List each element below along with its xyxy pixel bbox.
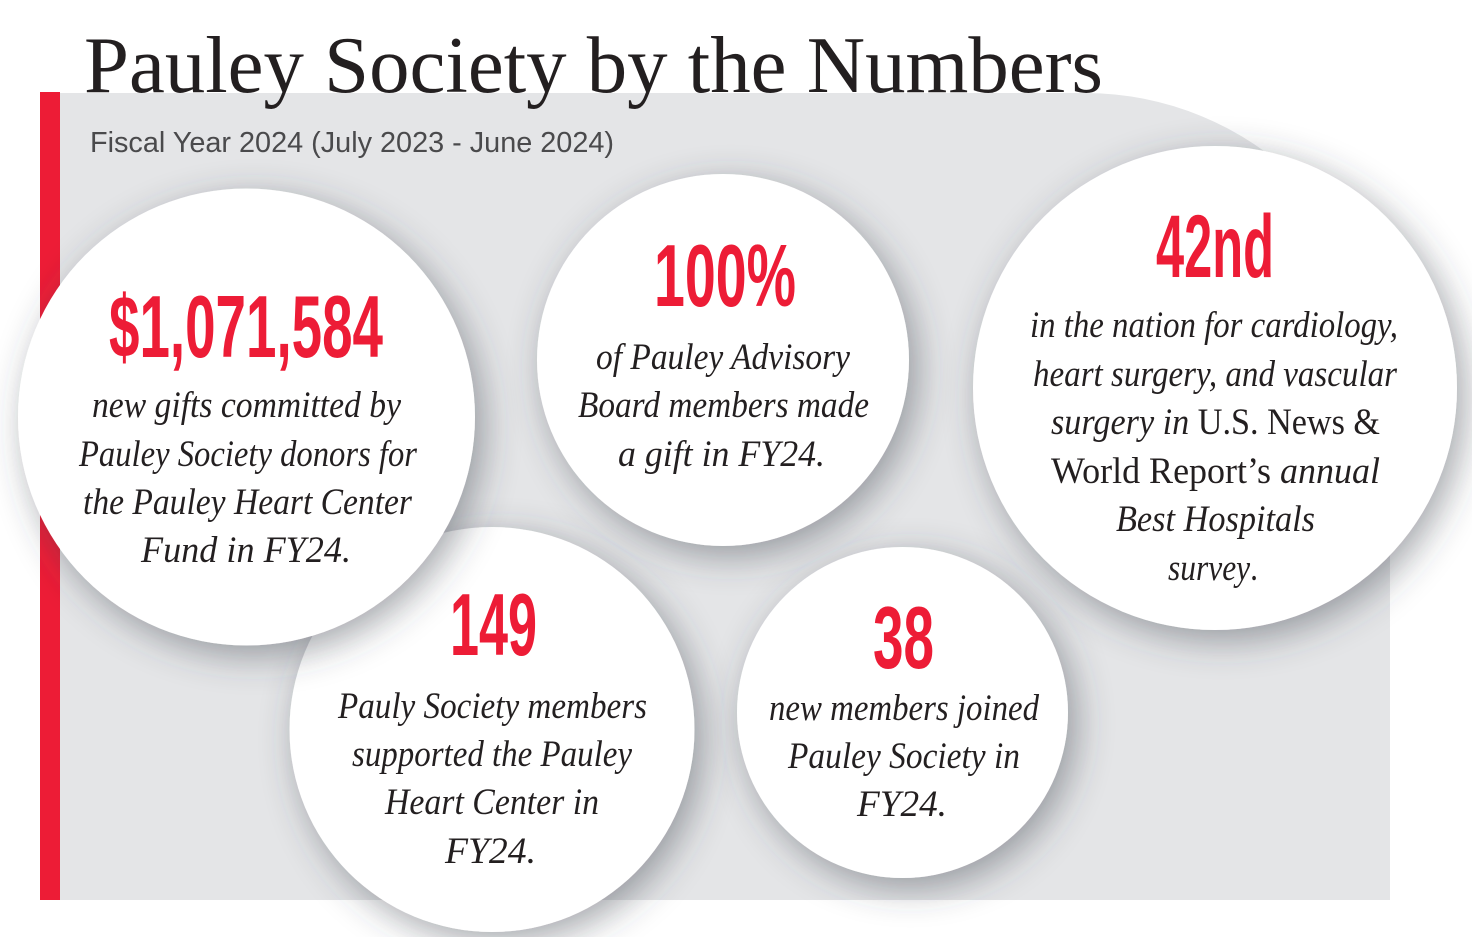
stat circle: 149 members: 149 <box>450 575 537 674</box>
stat circle: $1,071,584 gifts <box>18 188 475 646</box>
stat circle: 100% advisory board <box>537 174 909 546</box>
stat circle: 38 new members: new members joined <box>769 688 1039 729</box>
stat circle: $1,071,584 gifts: Fund in FY24. <box>140 530 351 571</box>
stat circle: 38 new members: 38 <box>873 588 934 687</box>
stat circle: 42nd national ranking: in the nation for cardiology, <box>1030 305 1398 346</box>
stat circle: 42nd national ranking <box>973 146 1457 630</box>
stat circle: $1,071,584 gifts: the Pauley Heart Center <box>83 482 413 523</box>
stat circle: 42nd national ranking: survey. <box>1168 548 1258 589</box>
stat circle: 100% advisory board: 100% <box>654 226 796 325</box>
stat circle: $1,071,584 gifts: new gifts committed by <box>92 385 402 426</box>
stat circle: 38 new members: Pauley Society in <box>787 736 1020 777</box>
stat circle: 149 members: supported the Pauley <box>352 734 633 775</box>
stat circle: 42nd national ranking: Best Hospitals <box>1116 499 1315 540</box>
stat circle: 42nd national ranking: World Report’s annual <box>1051 451 1380 492</box>
subtitle: Fiscal Year 2024 (July 2023 - June 2024) <box>90 127 614 159</box>
stat circle: 38 new members <box>737 547 1068 878</box>
title: Pauley Society by the Numbers <box>84 20 1103 110</box>
stat circle: 38 new members: FY24. <box>856 784 947 825</box>
stat circle: 42nd national ranking: 42nd <box>1156 196 1274 296</box>
stat circle: 149 members: Pauly Society members <box>337 686 647 727</box>
stat circle: 149 members: FY24. <box>444 831 536 872</box>
stat circle: 42nd national ranking: surgery in U.S. News & <box>1051 402 1380 443</box>
stat circle: 100% advisory board: a gift in FY24. <box>618 434 825 475</box>
stat circle: 100% advisory board: of Pauley Advisory <box>596 337 851 378</box>
stat circle: 42nd national ranking: heart surgery, and vascular <box>1033 354 1398 395</box>
stat circle: 149 members: Heart Center in <box>384 782 599 823</box>
stat circle: 100% advisory board: Board members made <box>578 385 869 426</box>
stat circle: $1,071,584 gifts: Pauley Society donors for <box>78 434 418 475</box>
gray background panel <box>60 93 1390 900</box>
red vertical bar <box>40 92 60 900</box>
stat circle: $1,071,584 gifts: $1,071,584 <box>109 277 383 376</box>
stat circle: 149 members <box>290 527 694 932</box>
